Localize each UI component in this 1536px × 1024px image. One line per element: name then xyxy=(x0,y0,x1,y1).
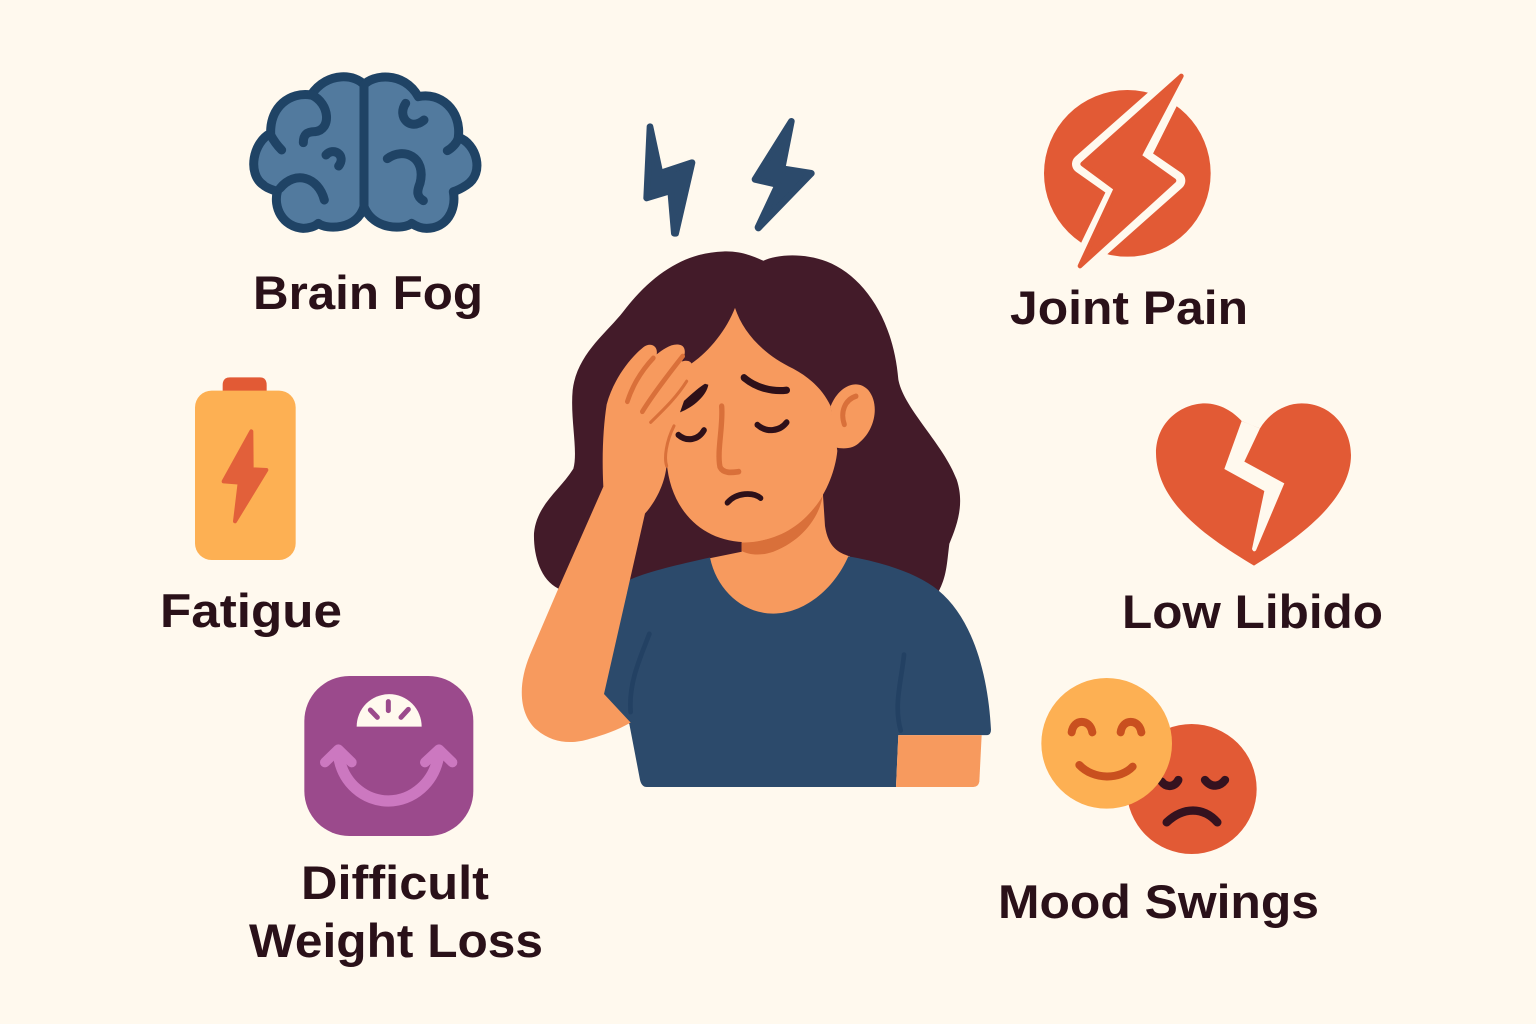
label: Mood Swings: Mood Swings xyxy=(998,875,1319,928)
icon: broken heart xyxy=(1156,403,1351,566)
icon: lightning bolts above head xyxy=(647,121,811,233)
neck shadow xyxy=(742,496,823,555)
label: Fatigue: Fatigue xyxy=(160,584,342,637)
hair xyxy=(534,251,960,598)
icon: mood faces xyxy=(1041,678,1257,854)
icon: scale xyxy=(304,676,473,836)
lower arm xyxy=(896,735,982,787)
shirt folds xyxy=(630,634,904,730)
shirt xyxy=(602,556,991,787)
label: Brain Fog: Brain Fog xyxy=(253,266,483,319)
nose xyxy=(719,406,739,472)
neck xyxy=(707,490,850,619)
icon: battery xyxy=(195,377,296,560)
label: Difficult Weight Loss: Difficult xyxy=(301,856,489,909)
label: Joint Pain: Joint Pain xyxy=(1010,281,1248,334)
eyes xyxy=(678,422,787,439)
icon: joint pain circle with bolt xyxy=(1044,76,1211,266)
face xyxy=(667,308,837,542)
label: Difficult Weight Loss xyxy=(249,856,543,967)
ear xyxy=(831,384,875,448)
arm and hand xyxy=(522,345,692,742)
illustration: woman holding head xyxy=(522,251,991,787)
label: Low Libido: Low Libido xyxy=(1122,585,1383,638)
label: Difficult Weight Loss: Weight Loss xyxy=(249,914,543,967)
icon: brain xyxy=(254,77,477,228)
mouth xyxy=(727,494,761,503)
eyebrows xyxy=(680,384,708,412)
hand details xyxy=(627,356,683,412)
